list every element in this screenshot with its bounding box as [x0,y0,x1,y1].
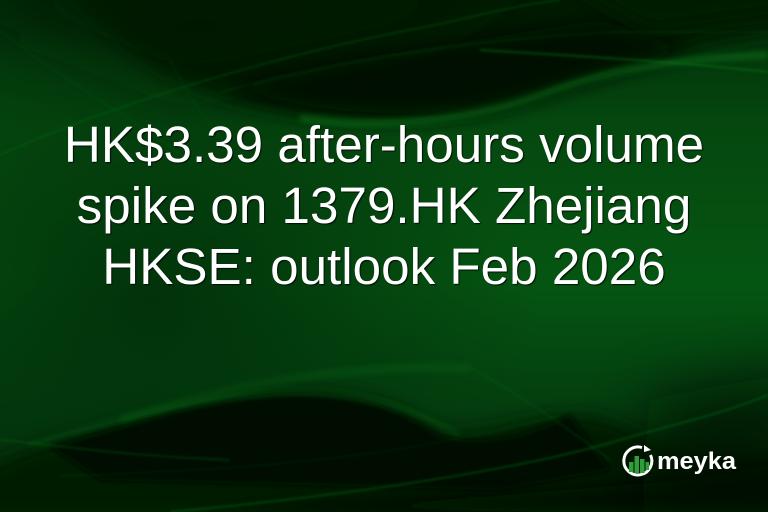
icon: circular ring with green bars [624,445,652,475]
title [64,116,704,295]
logo: meyka [622,445,737,476]
top dark area [60,0,768,121]
title: HKSE: outlook Feb 2026 [102,238,666,295]
bottom dark area [0,393,768,512]
title: spike on 1379.HK Zhejiang [77,177,691,234]
title: HK$3.39 after-hours volume [64,116,704,173]
wordmark: meyka [657,448,737,475]
